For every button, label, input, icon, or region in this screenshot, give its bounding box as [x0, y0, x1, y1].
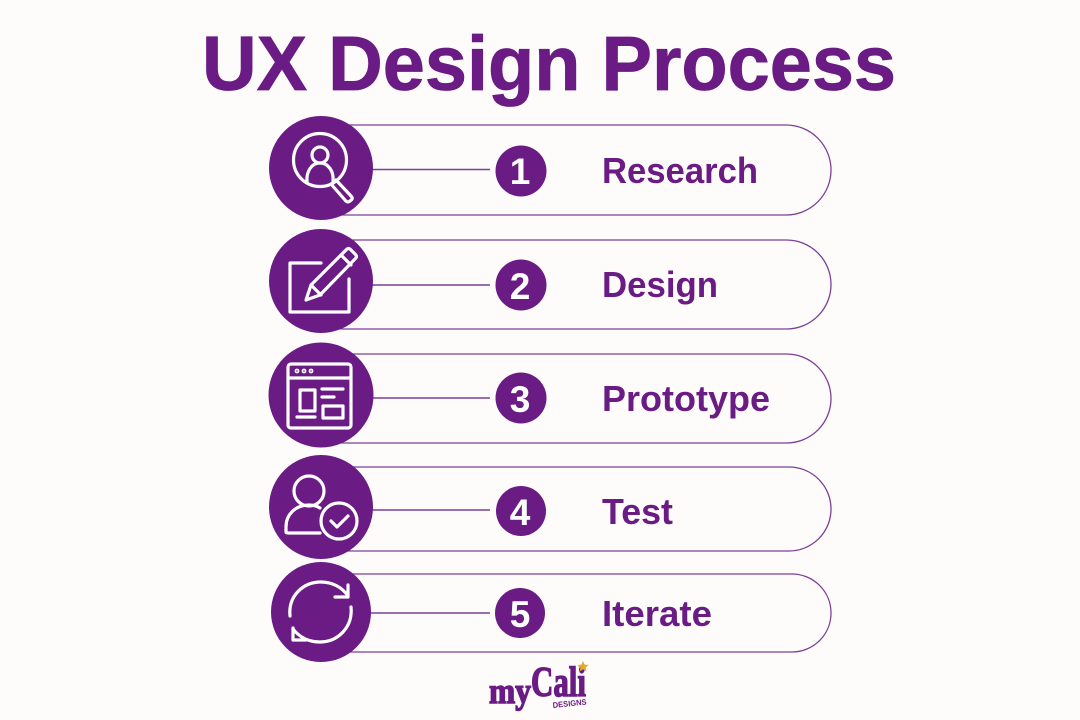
- label: Test: Test: [602, 491, 673, 532]
- logo: MyCali Designs: [489, 660, 588, 711]
- logo: MyCali Designs: Cali: [531, 660, 586, 706]
- number badge 4: 4: [510, 492, 531, 533]
- logo: MyCali Designs: my: [489, 671, 531, 711]
- number badge 3: [496, 372, 546, 424]
- label: Iterate: Iterate: [602, 593, 712, 634]
- label: Prototype: Prototype: [602, 378, 770, 419]
- number badge 4: [496, 486, 546, 536]
- step 2: Design: [269, 229, 831, 333]
- icon: pencil on square: [290, 248, 356, 312]
- icon: magnifier with user: [294, 134, 352, 202]
- icon: refresh arrows: [290, 582, 351, 642]
- step 3: Prototype: [268, 342, 831, 448]
- icon: browser wireframe: [288, 364, 351, 428]
- title: UX Design Process: [202, 21, 896, 107]
- number badge 1: 1: [510, 151, 530, 192]
- icon: user with check: [286, 476, 357, 539]
- number badge 2: 2: [510, 266, 530, 307]
- number badge 1: [496, 146, 546, 196]
- number badge 2: [496, 260, 546, 310]
- step 1: Research: [269, 116, 831, 220]
- step 5: Iterate: [271, 562, 831, 662]
- step 4: Test: [269, 455, 831, 559]
- number badge 5: [495, 588, 545, 638]
- label: Research: Research: [602, 150, 758, 191]
- logo: MyCali Designs: DESIGNS: [552, 697, 588, 710]
- number badge 3: 3: [510, 379, 530, 420]
- number badge 5: 5: [510, 594, 530, 635]
- label: Design: Design: [602, 264, 718, 305]
